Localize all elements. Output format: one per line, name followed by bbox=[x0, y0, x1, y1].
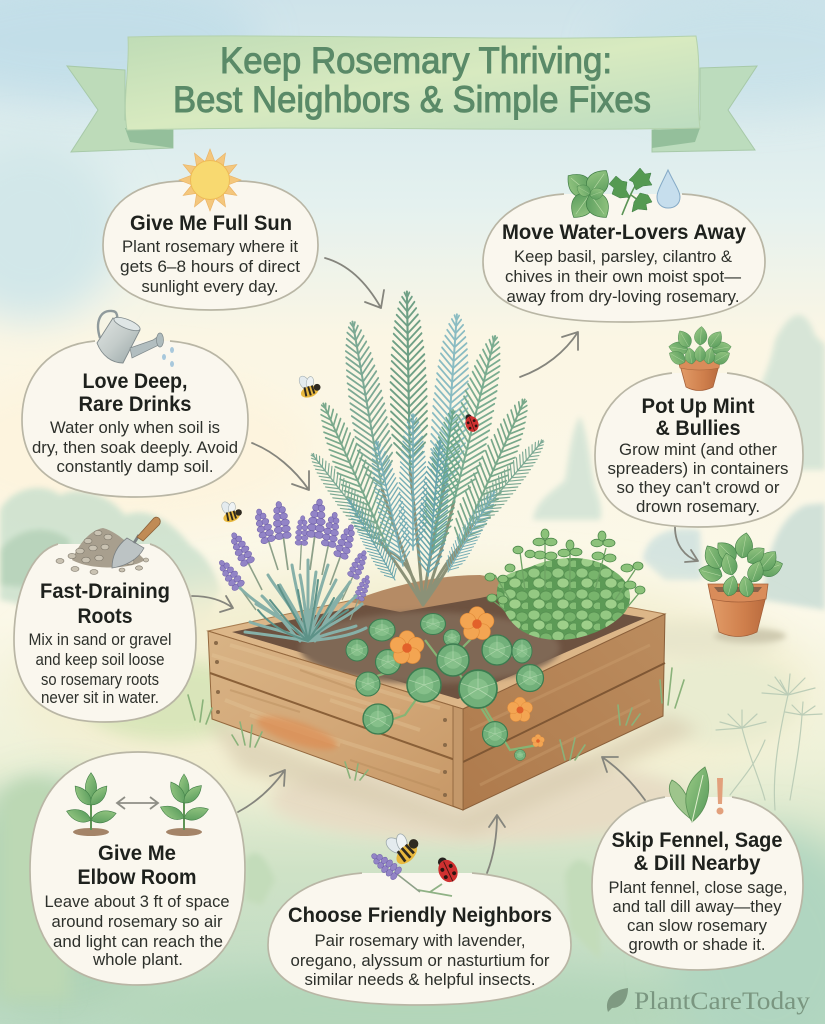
panel: choose friendly neighbors: similar needs & helpful insects. bbox=[304, 970, 536, 989]
icon: watering can bbox=[97, 311, 174, 367]
panel: fast-draining roots: and keep soil loose bbox=[36, 650, 164, 669]
icon: small potted mint bbox=[666, 326, 733, 390]
nasturtium plant bbox=[346, 607, 544, 760]
icon: sun bbox=[179, 149, 241, 211]
rosemary front branches bbox=[340, 291, 503, 585]
panel: choose friendly neighbors: Choose Friendly Neighbors bbox=[288, 903, 552, 927]
panel: love deep, rare drinks: Rare Drinks bbox=[78, 392, 192, 416]
rosemary stems bbox=[380, 470, 472, 605]
panel: move water-lovers away: Move Water-Lovers Away bbox=[502, 220, 746, 244]
banner right tail bbox=[652, 66, 757, 152]
oregano plant bbox=[485, 529, 645, 640]
panel: skip fennel, sage and dill: Skip Fennel, Sage bbox=[612, 828, 783, 852]
panel: skip fennel, sage and dill: & Dill Nearby bbox=[634, 851, 761, 875]
title line two: Best Neighbors & Simple Fixes bbox=[173, 79, 651, 120]
lavender plant bbox=[214, 498, 373, 641]
panel: pot up mint and bullies: spreaders) in containers bbox=[608, 459, 788, 478]
arrow: skip fennel bbox=[602, 757, 645, 800]
lavender foliage bbox=[240, 560, 366, 641]
potted mint on ground bbox=[697, 531, 786, 643]
distant trees right bbox=[533, 315, 825, 610]
panel: skip fennel, sage and dill: Plant fennel, close sage, bbox=[608, 878, 788, 897]
arrow: to water lovers bbox=[520, 332, 578, 377]
panel: pot up mint and bullies: & Bullies bbox=[656, 416, 741, 440]
panel: move water-lovers away: away from dry-loving rosemary. bbox=[506, 287, 740, 306]
panel: give me full sun: sunlight every day. bbox=[142, 277, 278, 296]
panel: fast-draining roots: Mix in sand or gravel bbox=[28, 630, 172, 649]
rosemary back branches bbox=[303, 313, 552, 558]
icon: gravel and trowel bbox=[56, 517, 160, 574]
panel: choose friendly neighbors: oregano, alyssum or nasturtium for bbox=[290, 951, 550, 970]
rosemary plant bbox=[303, 291, 552, 605]
panel: fast-draining roots: Fast-Draining bbox=[40, 579, 170, 603]
arrow: drainage bbox=[192, 596, 233, 612]
panel: love deep, rare drinks: dry, then soak deeply. Avoid bbox=[32, 438, 238, 457]
panel: skip fennel, sage and dill: can slow rosemary bbox=[627, 916, 767, 935]
raised garden bed bbox=[188, 575, 700, 835]
panel: give me full sun: gets 6–8 hours of direct bbox=[120, 257, 300, 276]
panel: give me elbow room bbox=[30, 752, 245, 985]
panel: move water-lovers away: Keep basil, parsley, cilantro & bbox=[514, 247, 733, 266]
panel: pot up mint and bullies bbox=[595, 326, 803, 527]
ground wash bbox=[0, 570, 825, 1024]
distant trees left bbox=[0, 488, 220, 640]
ladybug on rosemary bbox=[462, 412, 481, 434]
panel: love deep, rare drinks: Water only when soil is bbox=[50, 418, 220, 437]
arrow: mint to pot bbox=[675, 527, 698, 562]
panel: give me elbow room: and light can reach the bbox=[53, 932, 223, 951]
arrow: neighbors bbox=[487, 815, 505, 873]
panel: give me full sun bbox=[103, 149, 318, 310]
bee near rosemary bbox=[297, 374, 321, 400]
bed screws bbox=[214, 641, 447, 797]
panel: pot up mint and bullies: drown rosemary. bbox=[636, 497, 760, 516]
left wooden side bbox=[208, 631, 463, 810]
nasturtium flowers bbox=[390, 607, 544, 747]
panel: skip fennel, sage and dill: growth or shade it. bbox=[628, 935, 766, 954]
bee near lavender bbox=[220, 500, 242, 524]
panel: fast-draining roots: never sit in water. bbox=[41, 688, 159, 707]
panel: choose friendly neighbors: Pair rosemary with lavender, bbox=[314, 931, 526, 950]
soil and rim bbox=[208, 576, 665, 709]
arrows bbox=[192, 258, 698, 873]
panel: skip fennel, sage and dill: and tall dill away—they bbox=[612, 897, 782, 916]
panel: move water-lovers away: chives in their own moist spot— bbox=[505, 267, 741, 286]
grass tufts bbox=[188, 668, 684, 780]
oregano sprigs bbox=[492, 538, 640, 610]
panel: choose friendly neighbors bbox=[268, 825, 571, 1005]
banner left tail bbox=[67, 66, 173, 152]
icon: leaf and warning mark bbox=[669, 767, 724, 822]
icon: bee, ladybug and lavender bbox=[367, 825, 461, 898]
panel: fast-draining roots: so rosemary roots bbox=[41, 670, 159, 689]
panel: fast-draining roots bbox=[14, 517, 196, 722]
panel: give me elbow room: around rosemary so air bbox=[52, 912, 223, 931]
panel: give me full sun: Plant rosemary where it bbox=[122, 237, 298, 256]
panel: pot up mint and bullies: Pot Up Mint bbox=[642, 394, 754, 418]
bed shadow bbox=[205, 715, 700, 835]
panel: pot up mint and bullies: so they can't crowd or bbox=[616, 478, 780, 497]
icon: basil, parsley and water drop bbox=[561, 165, 680, 223]
arrow: sun to rosemary bbox=[325, 258, 384, 308]
panel: give me elbow room: Elbow Room bbox=[78, 865, 196, 889]
panel: give me elbow room: Leave about 3 ft of space bbox=[44, 892, 230, 911]
panel: love deep, rare drinks: constantly damp soil. bbox=[56, 457, 214, 476]
title text: Keep Rosemary Thriving: bbox=[220, 40, 612, 81]
panel: love deep, rare drinks: Love Deep, bbox=[82, 369, 188, 393]
banner ribbon bbox=[125, 36, 700, 130]
panel: fast-draining roots: Roots bbox=[78, 604, 133, 628]
nasturtium stems bbox=[365, 630, 538, 750]
panel: love deep, rare drinks bbox=[22, 311, 248, 497]
arrow: watering bbox=[252, 443, 309, 490]
title banner bbox=[67, 36, 757, 152]
panel: skip fennel, sage and dill bbox=[592, 767, 803, 970]
pot bbox=[711, 596, 766, 636]
lavender flower spikes bbox=[214, 498, 373, 622]
nasturtium leaves bbox=[346, 614, 544, 760]
panel: give me elbow room: whole plant. bbox=[92, 950, 183, 969]
right wooden side bbox=[463, 614, 665, 810]
panel: pot up mint and bullies: Grow mint (and other bbox=[619, 440, 777, 459]
logo: PlantCareToday: PlantCareToday bbox=[634, 988, 811, 1015]
icon: two spaced plants with arrow bbox=[65, 773, 210, 836]
foliage bbox=[697, 531, 785, 598]
dill plant background bbox=[716, 674, 822, 810]
arrow: elbow room bbox=[238, 770, 285, 812]
panel: give me elbow room: Give Me bbox=[98, 841, 176, 865]
panel: move water-lovers away bbox=[483, 165, 765, 322]
panel: give me full sun: Give Me Full Sun bbox=[130, 211, 292, 235]
